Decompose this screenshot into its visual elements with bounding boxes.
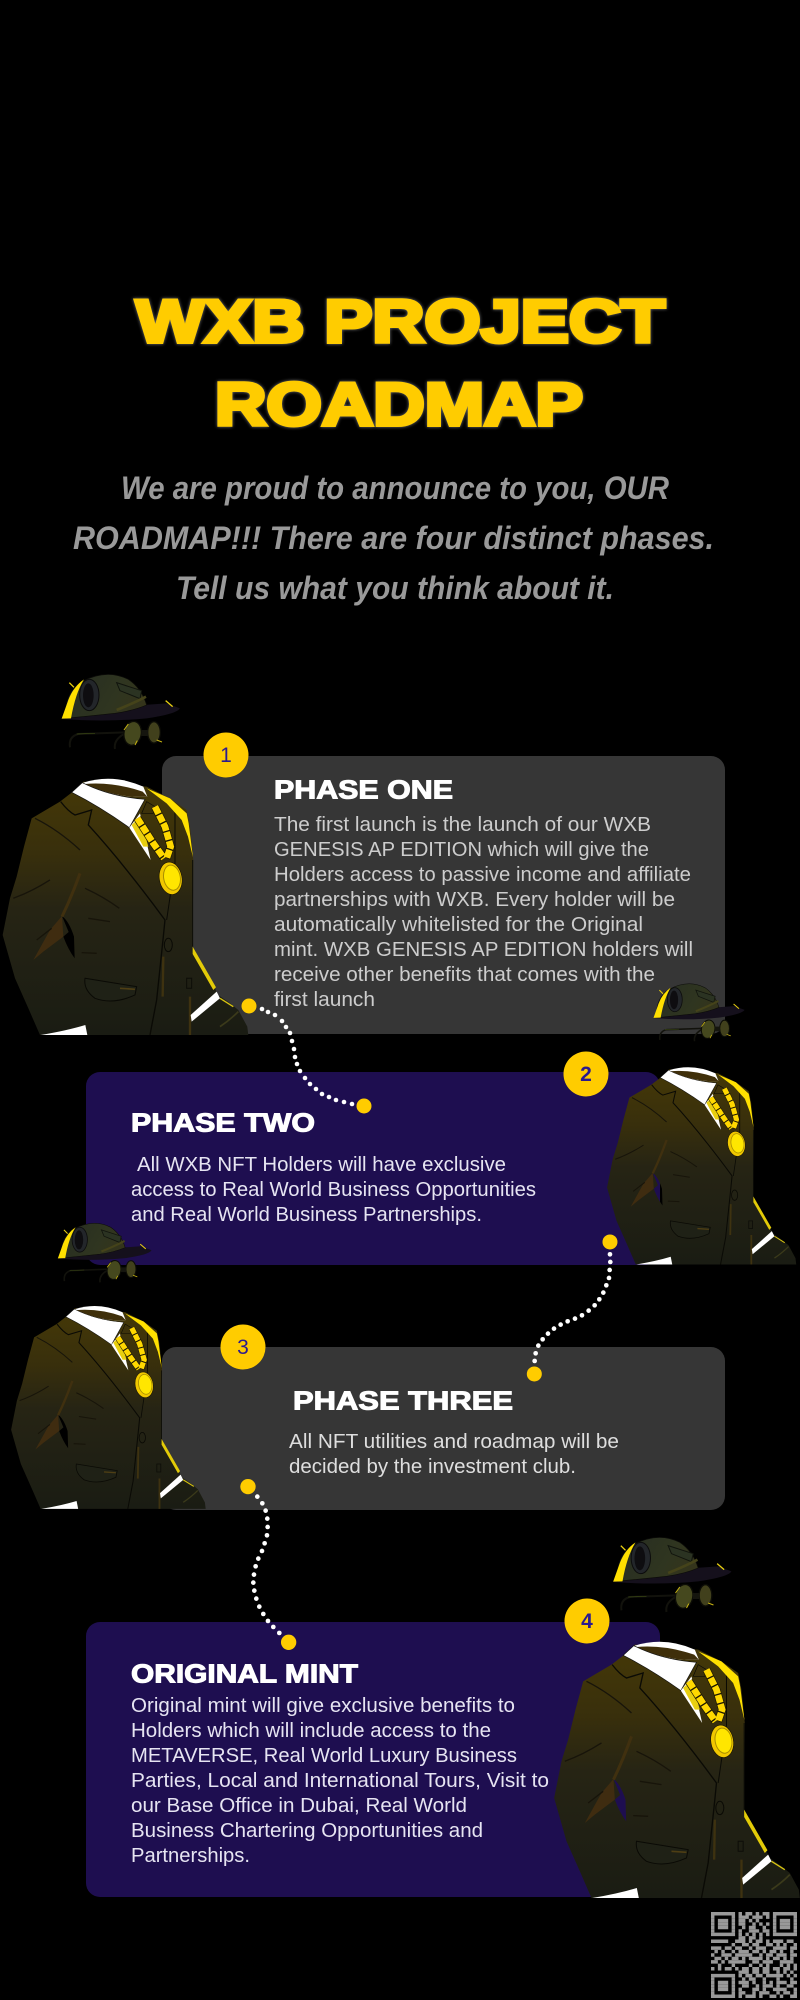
badge 1: 1 [220, 744, 232, 767]
connector: phase one to two [242, 998, 372, 1114]
badge 2: 2 [580, 1063, 592, 1086]
text block: original mint description: Partnerships. [131, 1844, 250, 1867]
text block: phase one description: mint. WXB GENESIS AP EDITION holders will [274, 938, 693, 961]
heading: phase one: PHASE ONE [274, 774, 453, 804]
text block: phase one description: The first launch is the launch of our WXB [274, 813, 651, 836]
text block: original mint description: Business Chartering Opportunities and [131, 1819, 483, 1842]
connector: phase three to original mint [240, 1479, 296, 1650]
character: suit and hat 3 [11, 1223, 206, 1509]
heading: original mint: ORIGINAL MINT [131, 1658, 358, 1688]
text block: phase three description: decided by the investment club. [289, 1455, 576, 1478]
badge 4: 4 [581, 1610, 593, 1633]
panel: phase two [86, 1072, 660, 1265]
text block: phase one description [274, 813, 693, 1011]
badge 4 [564, 1598, 610, 1644]
heading: phase three: PHASE THREE [293, 1386, 513, 1416]
text block: phase one description: automatically whitelisted for the Original [274, 913, 643, 936]
subtitle text: Tell us what you think about it. [176, 570, 614, 606]
text block: original mint description: our Base Office in Dubai, Real World [131, 1794, 467, 1817]
QR code [711, 1914, 797, 1996]
character: suit and hat 2 [607, 984, 796, 1264]
text block: phase two description: access to Real World Business Opportunities [131, 1178, 536, 1201]
text block: phase two description: and Real World Business Partnerships. [131, 1203, 482, 1226]
text block: original mint description: Parties, Local and International Tours, Visit to [131, 1769, 549, 1792]
text block: phase two description [131, 1153, 536, 1226]
panel: phase one [162, 756, 725, 1034]
title: WXB PROJECT [136, 288, 665, 355]
text block: phase one description: first launch [274, 988, 375, 1011]
text block: original mint description [131, 1694, 549, 1867]
text block: original mint description: Holders which will include access to the [131, 1719, 491, 1742]
text block: phase one description: receive other benefits that comes with the [274, 963, 655, 986]
text block: phase one description: partnerships with WXB. Every holder will be [274, 888, 675, 911]
panel: original mint [86, 1622, 660, 1897]
title [136, 288, 665, 438]
text block: original mint description: METAVERSE, Real World Luxury Business [131, 1744, 517, 1767]
character: suit and hat 4 [554, 1537, 800, 1898]
text block: phase one description: Holders access to passive income and affiliate [274, 863, 691, 886]
text block: phase three description: All NFT utilities and roadmap will be [289, 1430, 619, 1453]
subtitle text: We are proud to announce to you, OUR [121, 470, 669, 506]
subtitle text: ROADMAP!!! There are four distinct phases. [73, 520, 714, 556]
text block: phase two description: All WXB NFT Holders will have exclusive [137, 1153, 506, 1176]
subtitle text [73, 470, 714, 606]
badge 1 [204, 732, 248, 778]
text block: phase three description [289, 1430, 619, 1478]
panel: phase three [162, 1347, 725, 1510]
text block: original mint description: Original mint will give exclusive benefits to [131, 1694, 515, 1717]
text block: phase one description: GENESIS AP EDITION which will give the [274, 838, 649, 861]
badge 2 [564, 1052, 608, 1096]
badge 3: 3 [237, 1336, 249, 1359]
heading: phase two: PHASE TWO [131, 1108, 315, 1138]
badge 3 [220, 1324, 266, 1370]
title: ROADMAP [215, 371, 583, 438]
connector: phase two to three [527, 1234, 617, 1381]
character: suit and hat 1 [3, 674, 248, 1035]
